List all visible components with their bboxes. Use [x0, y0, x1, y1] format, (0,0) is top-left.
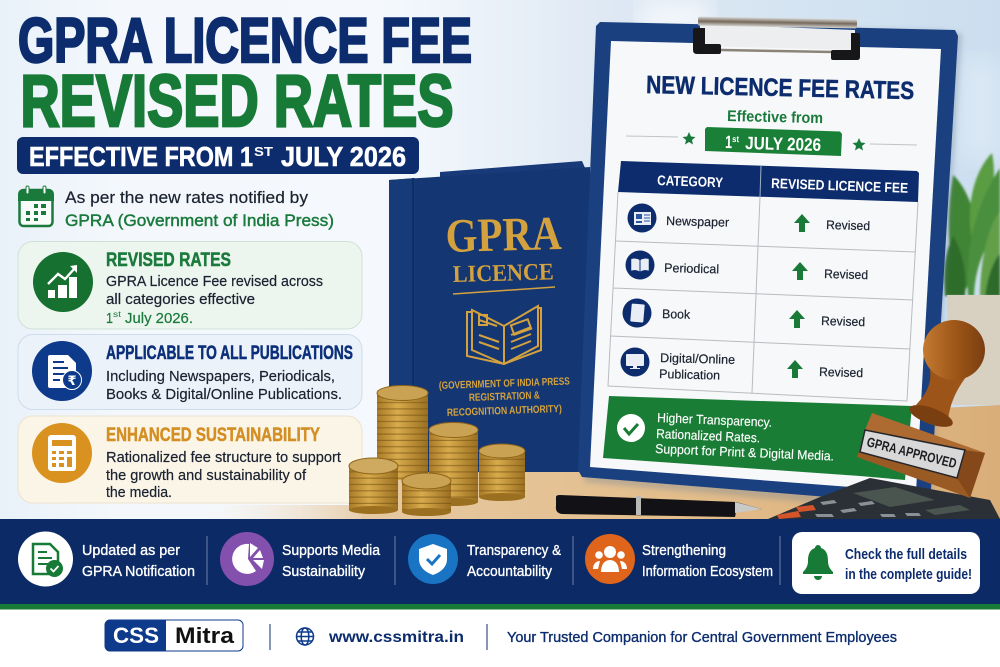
benefit: transparency: Accountability: [467, 563, 552, 580]
callout: full details: [792, 532, 980, 594]
icon: calculator: [32, 423, 92, 483]
plant pot: [947, 295, 1000, 405]
title line: GPRA LICENCE FEE: GPRA LICENCE FEE: [18, 6, 472, 76]
book title: GPRA: [445, 207, 563, 263]
body text: [106, 274, 323, 327]
row: newspaper: [628, 204, 870, 233]
row: digital online publication: Digital/Online: [660, 351, 735, 367]
effective from label: Effective from: [727, 108, 823, 127]
benefit: transparency: Transparency &: [467, 542, 561, 559]
sheet heading: NEW LICENCE FEE RATES: [646, 71, 914, 105]
panel: revised rates: [18, 242, 362, 329]
body text: July 2026.: [125, 311, 193, 327]
green summary strip: Rationalized Rates.: [656, 426, 760, 445]
book title: LICENCE: [452, 259, 554, 288]
body text: Books & Digital/Online Publications.: [106, 387, 342, 403]
body text: [106, 450, 341, 501]
coin stack: middle: [429, 422, 478, 506]
paper: [590, 41, 941, 492]
panel: enhanced sustainability: [18, 416, 362, 503]
tagline: Your Trusted Companion for Central Government Employees: [507, 629, 897, 646]
benefit: updated notification: GPRA Notification: [82, 563, 195, 580]
notification text: GPRA (Government of India Press): [65, 212, 334, 230]
body text: Rationalized fee structure to support: [106, 450, 341, 466]
effective date banner: JULY 2026: [281, 141, 406, 172]
green summary strip: Higher Transparency.: [657, 410, 772, 430]
effective date banner: [17, 137, 419, 174]
licence book: [389, 161, 590, 472]
logo: CSS Mitra: CSS: [113, 623, 159, 648]
benefit: information ecosystem: Strengthening: [642, 542, 726, 559]
book subtitle: RECOGNITION AUTHORITY): [447, 403, 562, 419]
icon: rising bar chart: [33, 252, 93, 312]
row: book: Book: [662, 307, 691, 322]
row: digital online publication: Revised: [819, 365, 863, 380]
panel: applicable to all publications: [18, 334, 362, 410]
heading: APPLICABLE TO ALL PUBLICATIONS: [106, 343, 353, 364]
callout: full details: Check the full details: [845, 547, 967, 563]
plant: [944, 153, 1000, 296]
row: periodical: Revised: [824, 267, 868, 282]
row: digital online publication: Publication: [659, 367, 720, 383]
notification text: As per the new rates notified by: [65, 189, 309, 207]
body text: the media.: [106, 485, 172, 501]
icon: open book emblem: [467, 306, 541, 364]
benefit: media sustainability: [220, 532, 381, 586]
date badge: JULY 2026: [745, 133, 821, 155]
benefit: information ecosystem: Information Ecosystem: [642, 563, 773, 580]
clipboard: [578, 17, 962, 510]
benefit: updated notification: [18, 532, 195, 586]
body text: GPRA Licence Fee revised across: [106, 274, 323, 290]
title line: REVISED RATES: REVISED RATES: [20, 61, 453, 142]
benefit bar: [0, 519, 1000, 610]
benefit: updated notification: Updated as per: [82, 542, 180, 559]
rubber stamp: [857, 320, 985, 498]
date badge: 1: [725, 132, 732, 152]
coin stack: front left: [349, 458, 398, 514]
date badge: st: [732, 134, 739, 144]
icon: calendar: [18, 186, 54, 226]
icon: document with rupee: [32, 341, 92, 401]
benefit: media sustainability: Sustainability: [282, 563, 365, 580]
effective date banner: EFFECTIVE FROM 1: [29, 141, 253, 172]
footer: [0, 610, 1000, 667]
book subtitle: REGISTRATION &: [469, 390, 540, 404]
effective date banner: ST: [254, 144, 273, 159]
benefit: transparency: [408, 534, 561, 584]
row: periodical: [626, 250, 868, 282]
body text: the growth and sustainability of: [106, 468, 307, 484]
table header: CATEGORY: [657, 172, 724, 190]
heading: REVISED RATES: [106, 250, 231, 271]
background: [0, 0, 1000, 520]
heading: ENHANCED SUSTAINABILITY: [106, 425, 320, 446]
body text: Including Newspapers, Periodicals,: [106, 369, 335, 385]
logo: CSS Mitra: [105, 620, 243, 652]
icon: bell: [803, 545, 833, 580]
logo: CSS Mitra: Mitra: [175, 623, 235, 648]
row: digital online publication: [620, 348, 863, 383]
body text: st: [113, 309, 122, 319]
row: newspaper: Revised: [826, 218, 870, 233]
icon: document with rupee: ₹: [67, 374, 77, 389]
stamp label: GPRA APPROVED: [865, 434, 958, 471]
coin stacks: [349, 386, 525, 516]
coin stack: front middle: [402, 473, 451, 516]
pen: [556, 495, 762, 517]
green summary strip: Support for Print & Digital Media.: [655, 441, 834, 463]
coin stack: right: [479, 444, 525, 501]
calculator: [768, 478, 1000, 519]
fee table: [608, 161, 919, 401]
green summary strip: [603, 396, 912, 480]
callout: full details: in the complete guide!: [845, 567, 972, 583]
title: [18, 6, 472, 142]
table header: [618, 161, 919, 202]
benefit: information ecosystem: [585, 534, 773, 584]
body text: 1: [106, 311, 113, 327]
row: periodical: Periodical: [664, 261, 719, 276]
body text: [106, 369, 342, 403]
body text: all categories effective: [106, 292, 255, 308]
date badge: [626, 127, 917, 156]
book subtitle: [439, 375, 570, 419]
row: newspaper: Newspaper: [666, 214, 729, 230]
icon: globe: [296, 628, 314, 645]
book title: [445, 207, 563, 288]
clip: [693, 17, 860, 60]
row: book: Revised: [821, 314, 865, 329]
coin stack: tall: [377, 386, 428, 480]
benefit: media sustainability: Supports Media: [282, 542, 381, 559]
row: book: [622, 298, 865, 329]
website: www.cssmitra.in: [328, 629, 464, 646]
notification text: [65, 189, 334, 230]
book subtitle: (GOVERNMENT OF INDIA PRESS: [439, 375, 570, 392]
table header: REVISED LICENCE FEE: [771, 175, 908, 196]
